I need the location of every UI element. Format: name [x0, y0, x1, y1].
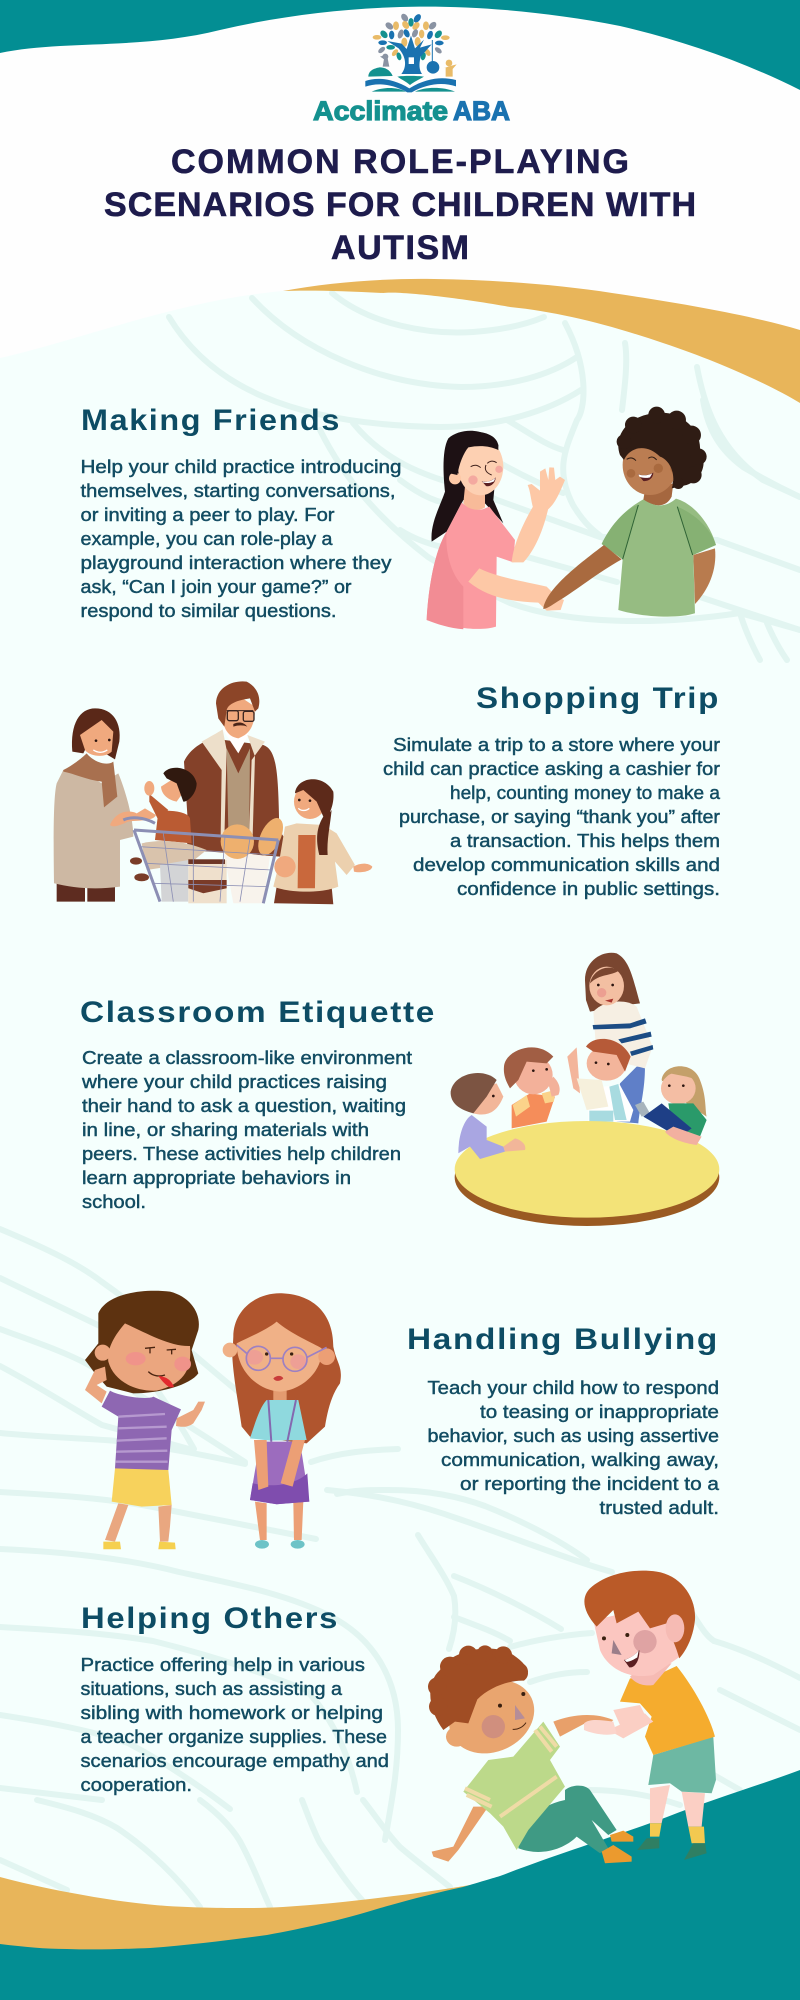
body: Shopping Trip	[383, 734, 721, 899]
title: COMMON ROLE-PLAYING	[171, 143, 629, 181]
body: Handling Bullying: or reporting the incident to a	[460, 1473, 720, 1494]
body: Shopping Trip: Simulate a trip to a store where your	[393, 734, 720, 755]
body: Shopping Trip: develop communication skills and	[413, 854, 720, 875]
section: Classroom Etiquette text	[80, 996, 436, 1212]
body: Handling Bullying: to teasing or inappropriate	[480, 1401, 719, 1422]
body: Making Friends: Help your child practice introducing	[80, 456, 402, 477]
body: Handling Bullying	[428, 1377, 720, 1518]
body: Shopping Trip: a transaction. This helps them	[450, 830, 720, 851]
top teal wave	[0, 0, 800, 90]
gold swoosh bottom	[0, 1877, 470, 1960]
section: Shopping Trip text	[383, 682, 721, 899]
heading: Making Friends: Making Friends	[81, 404, 341, 437]
section: Helping Others text	[80, 1602, 389, 1795]
bottom teal wave	[0, 1770, 800, 2000]
body: Helping Others: scenarios encourage empathy and	[80, 1750, 389, 1771]
body: Handling Bullying: communication, walking away,	[441, 1449, 719, 1470]
illustration: teacher and children at round table	[451, 953, 719, 1226]
body: Helping Others: cooperation.	[80, 1774, 192, 1795]
gold swoosh top	[283, 279, 800, 403]
illustration: boy helping a fallen child up	[428, 1571, 716, 1863]
title: SCENARIOS FOR CHILDREN WITH	[104, 186, 696, 224]
section: Handling Bullying text	[407, 1323, 720, 1518]
section: Making Friends text	[80, 404, 402, 621]
body: Classroom Etiquette	[81, 1047, 412, 1212]
body: Shopping Trip: confidence in public settings.	[457, 878, 720, 899]
body: Handling Bullying: Teach your child how to respond	[428, 1377, 719, 1398]
body: Classroom Etiquette: in line, or sharing materials with	[82, 1119, 369, 1140]
body: Making Friends: or inviting a peer to play. For	[80, 504, 334, 525]
body: Making Friends: respond to similar questions.	[80, 600, 336, 621]
heading: Classroom Etiquette: Classroom Etiquette	[80, 996, 436, 1029]
body: Helping Others	[80, 1654, 389, 1795]
body: Helping Others: a teacher organize supplies. These	[80, 1726, 387, 1747]
title	[104, 143, 696, 267]
illustration: boy teasing a crying girl	[85, 1291, 341, 1549]
body: Shopping Trip: child can practice asking a cashier for	[383, 758, 720, 779]
body: Helping Others: situations, such as assisting a	[80, 1678, 343, 1699]
body: Classroom Etiquette: learn appropriate behaviors in	[82, 1167, 351, 1188]
body: Making Friends: ask, “Can I join your game?” or	[80, 576, 352, 597]
body: Helping Others: sibling with homework or helping	[80, 1702, 383, 1723]
illustration: two children shaking hands	[427, 407, 716, 629]
body: Shopping Trip: help, counting money to make a	[450, 782, 721, 803]
heading: Helping Others: Helping Others	[81, 1602, 339, 1635]
body: Making Friends	[80, 456, 402, 621]
body: Classroom Etiquette: Create a classroom-like environment	[82, 1047, 412, 1068]
logo tree icon	[365, 12, 457, 92]
body: Handling Bullying: behavior, such as using assertive	[428, 1425, 719, 1446]
body: Handling Bullying: trusted adult.	[600, 1497, 719, 1518]
body: Shopping Trip: purchase, or saying “thank you” after	[399, 806, 720, 827]
logo wordmark: ABA	[453, 96, 510, 126]
body: Making Friends: themselves, starting conversations,	[80, 480, 396, 501]
heading: Shopping Trip: Shopping Trip	[476, 682, 720, 715]
logo: Acclimate ABA	[313, 12, 510, 126]
heading: Handling Bullying: Handling Bullying	[407, 1323, 719, 1356]
body: Classroom Etiquette: school.	[82, 1191, 146, 1212]
illustration: family with shopping cart	[54, 681, 372, 904]
body: Classroom Etiquette: peers. These activities help children	[82, 1143, 401, 1164]
title: AUTISM	[331, 229, 469, 267]
body: Helping Others: Practice offering help in various	[80, 1654, 365, 1675]
body: Making Friends: playground interaction where they	[80, 552, 392, 573]
body: Classroom Etiquette: their hand to ask a question, waiting	[82, 1095, 406, 1116]
logo wordmark: Acclimate	[313, 96, 448, 126]
body: Making Friends: example, you can role-play a	[80, 528, 333, 549]
body: Classroom Etiquette: where your child practices raising	[81, 1071, 387, 1092]
